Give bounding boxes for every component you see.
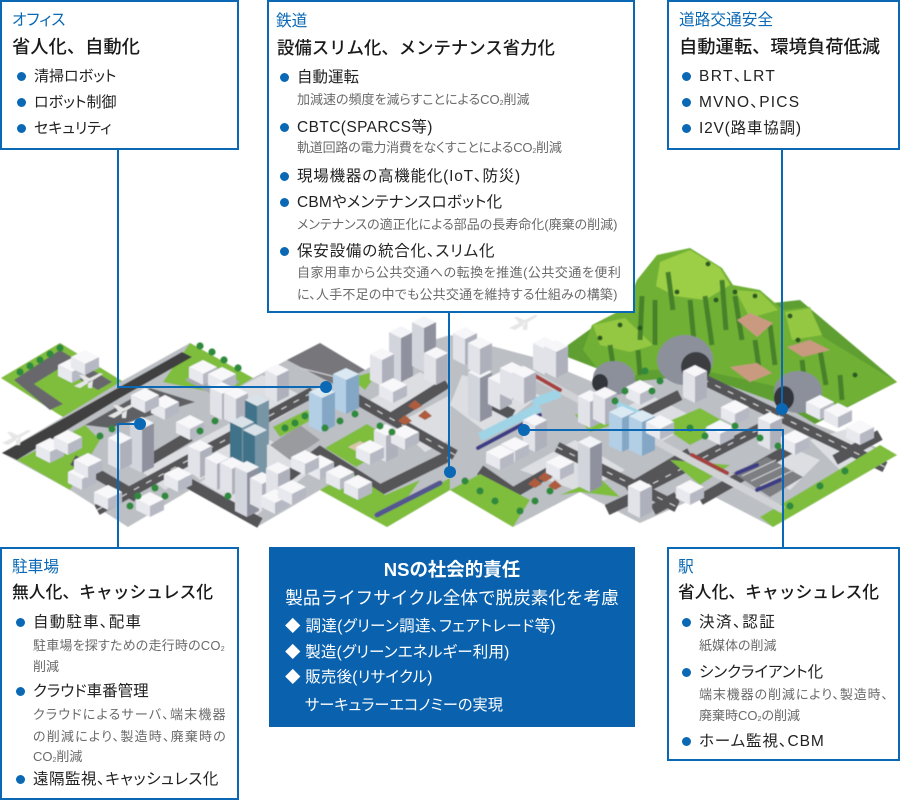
parking note continued: CO2削減	[33, 749, 82, 764]
railway item: 自動運転	[297, 69, 359, 86]
city ground	[1, 335, 897, 527]
parking item: 遠隔監視、キャッシュレス化	[33, 771, 219, 788]
station note: 端末機器の削減により、製造時、	[699, 687, 889, 702]
office item: 清掃ロボット	[34, 68, 116, 85]
railway item: CBTC(SPARCS等)	[297, 119, 433, 136]
connector: parking horizontal	[117, 423, 140, 425]
office item: セキュリティ	[34, 120, 112, 137]
title: NSの社会的責任	[384, 559, 520, 580]
marker: office	[320, 381, 332, 393]
panel: road traffic safety	[667, 0, 900, 150]
station note: 紙媒体の削減	[699, 638, 777, 653]
subtitle: 製品ライフサイクル全体で脱炭素化を考慮	[285, 588, 619, 608]
marker: railway	[444, 466, 456, 478]
parking plots	[287, 343, 365, 385]
office heading: 省人化、自動化	[12, 36, 140, 57]
railway item: 保安設備の統合化、スリム化	[297, 243, 495, 260]
station note continued: 廃棄時CO2の削減	[699, 708, 800, 723]
railway note: 自家用車から公共交通への転換を推進(公共交通を便利	[297, 265, 621, 280]
office label: オフィス	[12, 12, 65, 29]
panel: office	[0, 0, 239, 150]
parking label: 駐車場	[12, 559, 59, 576]
railway item: 現場機器の高機能化(IoT、防災)	[297, 168, 521, 185]
connector: office to map	[117, 150, 119, 388]
panel: NS social responsibility	[269, 547, 635, 727]
road item: BRT、LRT	[699, 68, 776, 85]
parking note: 駐車場を探すための走行時のCO2	[33, 638, 225, 653]
tunnels	[593, 361, 635, 395]
panel: railway	[267, 0, 635, 313]
marker: road safety	[776, 403, 788, 415]
station roofs	[480, 393, 643, 437]
railway note continued: に、人手不足の中でも公共交通を維持する仕組みの構築)	[297, 287, 618, 302]
mountain plate	[557, 300, 897, 424]
green blocks	[325, 424, 398, 467]
marker: station	[518, 424, 530, 436]
road label: 道路交通安全	[679, 12, 773, 29]
connector: office horizontal	[117, 386, 327, 388]
mountain trees	[598, 262, 858, 378]
railway heading: 設備スリム化、メンテナンス省力化	[277, 38, 555, 58]
buildings	[58, 358, 86, 383]
connector: road safety	[781, 150, 783, 408]
planes	[509, 315, 538, 330]
item: procurement: ◆ 調達(グリーン調達、フェアトレード等)	[285, 618, 556, 635]
connector: station horizontal	[524, 429, 784, 431]
roads	[73, 373, 885, 523]
parking note: クラウドによるサーバ、端末機器	[33, 707, 227, 722]
parking item: 自動駐車、配車	[33, 614, 142, 631]
houses	[408, 400, 422, 410]
item: after sale: ◆ 販売後(リサイクル)	[285, 669, 433, 686]
station heading: 省人化、キャッシュレス化	[678, 583, 879, 602]
item: manufacturing: ◆ 製造(グリーンエネルギー利用)	[285, 644, 510, 661]
road item: I2V(路車協調)	[699, 120, 802, 137]
parking heading: 無人化、キャッシュレス化	[12, 583, 213, 602]
railway note: メンテナンスの適正化による部品の長寿命化(廃棄の削減)	[297, 217, 617, 232]
item: circular economy: サーキュラーエコノミーの実現	[305, 697, 503, 714]
station label: 駅	[678, 559, 694, 576]
station item: ホーム監視、CBM	[699, 733, 825, 750]
road item: MVNO、PICS	[699, 94, 800, 111]
office item: ロボット制御	[34, 94, 116, 111]
connector: station vertical	[782, 429, 784, 548]
road heading: 自動運転、環境負荷低減	[679, 36, 880, 57]
station item: シンクライアント化	[699, 664, 823, 681]
mountain	[583, 248, 897, 415]
parking note continued: 削減	[33, 659, 59, 674]
trees	[16, 368, 24, 376]
road markings	[97, 373, 885, 510]
runway	[2, 352, 192, 460]
railway note: 加減速の頻度を減らすことによるCO2削減	[297, 92, 530, 107]
railway item: CBMやメンテナンスロボット化	[297, 194, 502, 211]
parking item: クラウド車番管理	[33, 683, 149, 700]
parcels	[140, 372, 880, 515]
marker: parking	[134, 418, 146, 430]
parking note continued: の削減により、製造時、廃棄時の	[33, 729, 227, 744]
airport grass	[1, 343, 122, 417]
panel: parking	[0, 547, 239, 800]
station item: 決済、認証	[699, 614, 776, 631]
connector: railway	[448, 312, 450, 472]
railway	[520, 368, 783, 510]
railway label: 鉄道	[276, 13, 307, 30]
trains	[377, 370, 780, 515]
railway note: 軌道回路の電力消費をなくすことによるCO2削減	[297, 140, 562, 155]
panel: station	[667, 547, 900, 761]
connector: parking vertical	[117, 423, 119, 548]
